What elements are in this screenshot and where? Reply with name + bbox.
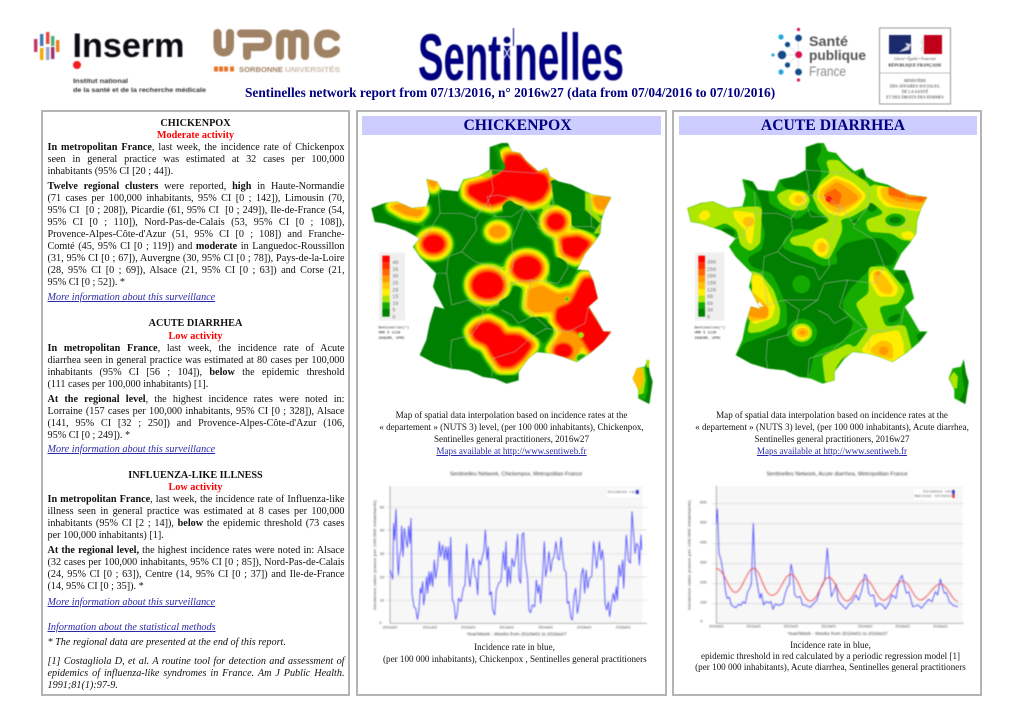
- line chart: chickenpox incidence: [372, 470, 647, 637]
- map legend: UMR S 1136: [378, 331, 400, 335]
- section: chickenpox summary: Twelve regional clusters were reported, high in Haute-Normandie: [48, 181, 344, 192]
- logo: Inserm: [33, 27, 206, 94]
- line chart: acute diarrhea incidence with epidemic threshold: 2014w01: [858, 625, 873, 629]
- line chart: chickenpox incidence: 2010w01: [383, 626, 397, 630]
- logo: Ministère: ET DES DROITS DES FEMMES: [886, 94, 944, 100]
- section: influenza-like illness summary: (32 cases per 100,000 inhabitants, 95% CI [0 ; 85]), Nord-Pas-de-Calais: [48, 556, 344, 568]
- heading: chickenpox: CHICKENPOX: [463, 117, 572, 134]
- line chart: chickenpox incidence: 30: [380, 551, 385, 556]
- yellow zones: [697, 175, 929, 362]
- map legend: 300: [707, 259, 716, 265]
- orange zones: [749, 182, 929, 355]
- panel: weekly summary text: [41, 110, 350, 696]
- heading: acute diarrhea: [679, 116, 977, 135]
- line chart: acute diarrhea incidence with epidemic threshold: Incidence rates (cases per 100,000 inhabitants): [686, 499, 691, 610]
- line chart: acute diarrhea incidence with epidemic threshold: 200: [700, 580, 707, 585]
- section: chickenpox summary: seen in general practice was estimated at 32 cases per 100,000: [48, 154, 344, 165]
- section: influenza-like illness summary: Low activity: [168, 482, 223, 492]
- map legend: UMR S 1136: [694, 331, 716, 335]
- line chart: acute diarrhea incidence with epidemic threshold: 2012w01: [784, 625, 798, 629]
- caption: chickenpox map: Sentinelles general practitioners, 2016w27: [434, 434, 589, 444]
- line chart: acute diarrhea incidence with epidemic threshold: 300: [700, 560, 707, 565]
- lime zones: [685, 160, 929, 383]
- section: acute diarrhea summary: ACUTE DIARRHEA: [149, 318, 242, 328]
- logo: Santé publique France: [770, 27, 866, 82]
- section: chickenpox summary: Comté (45, 95% CI [0 ; 119]) and moderate in Languedoc-Roussillon: [48, 241, 344, 252]
- regional boundaries: [733, 170, 916, 377]
- logo: Inserm: Inserm: [72, 27, 184, 65]
- section: chickenpox summary: [47, 118, 344, 303]
- section: influenza-like illness summary: In metropolitan France, last week, the incidence rate of Influenza-like: [48, 494, 344, 504]
- reference citation: epidemics of influenza-like syndromes in France. Am J Public Health.: [48, 668, 344, 679]
- line chart: acute diarrhea incidence with epidemic threshold: Incidence rate: [923, 489, 953, 494]
- line chart: chickenpox incidence: 2015w01: [577, 626, 592, 630]
- line chart: chickenpox incidence: 2016w01: [616, 626, 631, 630]
- section: chickenpox summary: More information about this surveillance: [48, 292, 215, 303]
- line chart: acute diarrhea incidence with epidemic threshold: 2011w01: [746, 625, 761, 629]
- section: influenza-like illness summary: illness seen in general practice was estimated at 8 cases per 100,000: [48, 506, 344, 516]
- line chart: acute diarrhea incidence with epidemic threshold: 2016w01: [933, 625, 948, 629]
- line chart: chickenpox incidence: 2014w01: [538, 626, 553, 630]
- map legend: Sentinelles(*): [378, 326, 409, 331]
- caption: chickenpox chart: Incidence rate in blue,: [474, 642, 555, 652]
- line chart: acute diarrhea incidence with epidemic threshold: National threshold: [915, 494, 954, 499]
- section: influenza-like illness summary: [47, 470, 344, 608]
- logo: UPMC Sorbonne Universités: [212, 28, 341, 74]
- section: chickenpox summary: (31, 95% CI [0 ; 67]), Auvergne (30, 95% CI [0 ; 78]), Pays-de-la-Loire: [48, 253, 344, 264]
- caption: acute diarrhea chart: [695, 640, 966, 672]
- caption: acute diarrhea map: « departement » (NUTS 3) level, (per 100 000 inhabitants), Acute diarrhea,: [695, 422, 969, 432]
- logo: Sentinelles wordmark: nelles: [514, 20, 624, 94]
- logo: Santé publique France: publique: [809, 47, 866, 63]
- caption: chickenpox chart: (per 100 000 inhabitants), Chickenpox , Sentinelles general practitioners: [383, 654, 647, 664]
- map legend: 20: [392, 287, 398, 293]
- section: chickenpox summary: inhabitants (95% CI [20 ; 44]).: [48, 166, 173, 177]
- section: acute diarrhea summary: (111 cases per 100,000 inhabitants) [1].: [48, 378, 208, 390]
- logo: Inserm: de la santé et de la recherche médicale: [73, 87, 206, 94]
- section: influenza-like illness summary: (24, 95% CI [0 ; 63]), Centre (14, 95% CI [0 ; 37]) and Ile-de-France: [48, 568, 344, 580]
- section: acute diarrhea summary: 95% CI [0 ; 249]). *: [48, 430, 130, 440]
- map legend: 30: [707, 308, 713, 314]
- map legend: Sentinelles(*): [694, 326, 725, 331]
- heading: chickenpox: [362, 116, 661, 135]
- panel: acute diarrhea column frame: [672, 110, 982, 696]
- note: regional data: * The regional data are presented at the end of this report.: [48, 637, 286, 648]
- map legend: 200: [707, 274, 716, 280]
- line chart: chickenpox incidence: 40: [380, 527, 385, 532]
- caption: acute diarrhea chart: (per 100 000 inhabitants), Acute diarrhea, Sentinelles general practitioners: [695, 662, 966, 672]
- logo: Ministère: RÉPUBLIQUE FRANÇAISE: [888, 62, 942, 68]
- line chart: chickenpox incidence: Incidence rate: [607, 490, 638, 495]
- section: chickenpox summary: In metropolitan France, last week, the incidence rate of Chickenpox: [48, 142, 344, 153]
- caption: acute diarrhea map: Maps available at http://www.sentiweb.fr: [757, 446, 907, 456]
- map legend: 60: [707, 301, 713, 307]
- map legend: 10: [392, 301, 398, 307]
- section: acute diarrhea summary: In metropolitan France, last week, the incidence rate of Acute: [48, 342, 344, 354]
- line chart: acute diarrhea incidence with epidemic threshold: Year/Week - Weeks from 2010w01 to 2016w27: [788, 631, 888, 636]
- section: acute diarrhea summary: Lorraine (157 cases per 100,000 inhabitants, 95% CI [0 ; 328]), Alsace: [48, 406, 344, 416]
- logo: Sentinelles wordmark: Sent: [418, 20, 501, 94]
- caption: chickenpox map: [379, 410, 644, 456]
- map legend: 150: [707, 280, 716, 286]
- section: influenza-like illness summary: INFLUENZA-LIKE ILLNESS: [128, 470, 263, 480]
- map legend: 0: [392, 314, 395, 320]
- line chart: chickenpox incidence: Incidence rates (cases per 100,000 inhabitants): [372, 499, 377, 610]
- section: acute diarrhea summary: inhabitants (95% CI [56 ; 104]), below the epidemic threshold: [48, 366, 345, 378]
- logo: Ministère: [878, 27, 952, 105]
- section: acute diarrhea summary: (141, 95% CI [32 ; 250]) and Provence-Alpes-Côte-d'Azur (106,: [48, 418, 344, 428]
- map legend: 250: [707, 267, 716, 273]
- map legend: [694, 252, 725, 341]
- map: acute diarrhea incidence in France: [686, 142, 970, 405]
- section: chickenpox summary: (71 cases per 100,000 inhabitants, 95% CI [0 ; 142]), Limousin (70,: [48, 193, 344, 204]
- caption: chickenpox map: « departement » (NUTS 3) level, (per 100 000 inhabitants), Chickenpox,: [379, 422, 644, 432]
- line chart: chickenpox incidence: 10: [380, 598, 385, 603]
- section: chickenpox summary: 95% CI [0 ; 208]), Picardie (61, 95% CI [0 ; 249]), Ile-de-France (54,: [48, 205, 344, 216]
- caption: chickenpox map: Map of spatial data interpolation based on incidence rates at the: [396, 410, 627, 420]
- line chart: acute diarrhea incidence with epidemic threshold: 600: [700, 500, 707, 505]
- section: acute diarrhea summary: diarrhea seen in general practice was estimated at 80 cases per 100,000: [48, 354, 344, 366]
- section: acute diarrhea summary: More information about this surveillance: [48, 444, 215, 454]
- caption: acute diarrhea map: Sentinelles general practitioners, 2016w27: [754, 434, 910, 444]
- caption: acute diarrhea chart: epidemic threshold in red calculated by a periodic regression model [1]: [701, 651, 960, 661]
- cool pockets: [487, 143, 600, 340]
- map legend: INSERM, UPMC: [378, 337, 405, 341]
- line chart: chickenpox incidence: 0: [379, 620, 382, 625]
- caption: chickenpox map: Maps available at http://www.sentiweb.fr: [436, 446, 587, 456]
- section: acute diarrhea summary: [47, 318, 345, 454]
- map legend: INSERM, UPMC: [694, 337, 721, 341]
- logo: UPMC Sorbonne Universités: UNIVERSITÉS: [285, 65, 340, 74]
- logo: Santé publique France: France: [809, 63, 846, 79]
- logo: Sentinelles wordmark: [418, 20, 624, 94]
- line chart: acute diarrhea incidence with epidemic threshold: 2010w01: [709, 625, 724, 629]
- section: chickenpox summary: Moderate activity: [157, 130, 234, 141]
- corsica: [949, 359, 969, 404]
- logo: Inserm: Institut national: [73, 78, 128, 85]
- logo: Ministère: DES AFFAIRES SOCIALES,: [890, 84, 940, 90]
- map legend: 40: [392, 260, 398, 266]
- caption: chickenpox chart: [383, 642, 647, 664]
- map legend: 120: [707, 287, 716, 293]
- dark green lows: [719, 142, 928, 377]
- amber zones: [743, 178, 929, 360]
- map legend: 90: [707, 294, 713, 300]
- reference citation: 1991;81(1):97-9.: [48, 680, 118, 691]
- link: statistical methods: Information about the statistical methods: [48, 622, 216, 633]
- map legend: 35: [392, 267, 398, 273]
- section: influenza-like illness summary: (14, 95% CI [0 ; 35]). *: [48, 580, 144, 592]
- map legend: 25: [392, 280, 398, 286]
- logo: Santé publique France: Santé: [809, 33, 848, 49]
- section: chickenpox summary: CHICKENPOX: [160, 118, 231, 129]
- section: influenza-like illness summary: per 100,000 inhabitants) [1].: [48, 530, 164, 540]
- line chart: chickenpox incidence: 2011w01: [423, 626, 437, 630]
- report heading: Sentinelles network report from 07/13/2016, n° 2016w27 (data from 07/04/2016 to 07/10/2016): [245, 85, 775, 100]
- line chart: acute diarrhea incidence with epidemic threshold: Sentinelles Network, Acute diarrhea, Metropolitan France: [766, 471, 908, 477]
- section: acute diarrhea summary: At the regional level, the highest incidence rates were noted in:: [48, 394, 344, 404]
- section: chickenpox summary: (28, 95% CI [0 ; 69]), Alsace (21, 95% CI [0 ; 63]) and Corse (21,: [48, 265, 344, 276]
- line chart: acute diarrhea incidence with epidemic threshold: [686, 470, 964, 636]
- map legend: 0: [707, 314, 710, 320]
- line chart: chickenpox incidence: 2012w01: [461, 626, 476, 630]
- logo: Ministère: Liberté • Égalité • Fraternité: [893, 56, 936, 61]
- line chart: acute diarrhea incidence with epidemic threshold: 500: [700, 520, 707, 525]
- reference citation: [1] Costagliola D, et al. A routine tool for detection and assessment of: [48, 656, 344, 667]
- section: chickenpox summary: 95% CI [0 ; 110]), Nord-Pas-de-Calais (53, 95% CI [0 ; 108]),: [48, 217, 344, 228]
- logo: Ministère: DE LA SANTÉ: [902, 89, 929, 94]
- line chart: acute diarrhea incidence with epidemic threshold: 100: [700, 600, 707, 605]
- map legend: 5: [392, 308, 395, 314]
- line chart: acute diarrhea incidence with epidemic threshold: 2013w01: [821, 625, 836, 629]
- corsica: [633, 359, 653, 404]
- section: influenza-like illness summary: At the regional level, the highest incidence rates were noted in: Alsace: [48, 544, 344, 556]
- heading: acute diarrhea: ACUTE DIARRHEA: [761, 117, 905, 134]
- section: chickenpox summary: Provence-Alpes-Côte-d'Azur (51, 95% CI [0 ; 108]) and Franche-: [48, 229, 344, 240]
- logo: UPMC Sorbonne Universités: SORBONNE: [239, 65, 283, 74]
- map legend: [378, 252, 409, 341]
- caption: acute diarrhea chart: Incidence rate in blue,: [790, 640, 871, 650]
- line chart: chickenpox incidence: 20: [380, 574, 385, 579]
- section: influenza-like illness summary: inhabitants (95% CI [2 ; 14]), below the epidemic threshold (73 cases: [48, 518, 344, 528]
- line chart: chickenpox incidence: 50: [380, 505, 385, 510]
- line chart: chickenpox incidence: Sentinelles Network, Chickenpox, Metropolitan France: [450, 471, 582, 477]
- logo: Ministère: MINISTÈRE: [904, 78, 927, 83]
- panel: chickenpox column frame: [356, 110, 667, 696]
- section: chickenpox summary: 95% CI [0 ; 52]). *: [48, 277, 125, 288]
- section: acute diarrhea summary: Low activity: [168, 330, 223, 342]
- map legend: 30: [392, 274, 398, 280]
- regional boundaries: [417, 170, 600, 377]
- section: influenza-like illness summary: More information about this surveillance: [48, 596, 215, 608]
- line chart: chickenpox incidence: 2013w01: [499, 626, 514, 630]
- line chart: acute diarrhea incidence with epidemic threshold: 400: [700, 540, 707, 545]
- line chart: acute diarrhea incidence with epidemic threshold: 0: [700, 618, 703, 623]
- line chart: chickenpox incidence: Year/Week - Weeks from 2010w01 to 2016w27: [467, 632, 567, 637]
- line chart: acute diarrhea incidence with epidemic threshold: 2015w01: [895, 625, 910, 629]
- caption: acute diarrhea map: [695, 410, 969, 456]
- map legend: 15: [392, 294, 398, 300]
- map: chickenpox incidence in France: [370, 142, 654, 404]
- reference citation: [48, 656, 346, 691]
- caption: acute diarrhea map: Map of spatial data interpolation based on incidence rates at the: [716, 410, 948, 420]
